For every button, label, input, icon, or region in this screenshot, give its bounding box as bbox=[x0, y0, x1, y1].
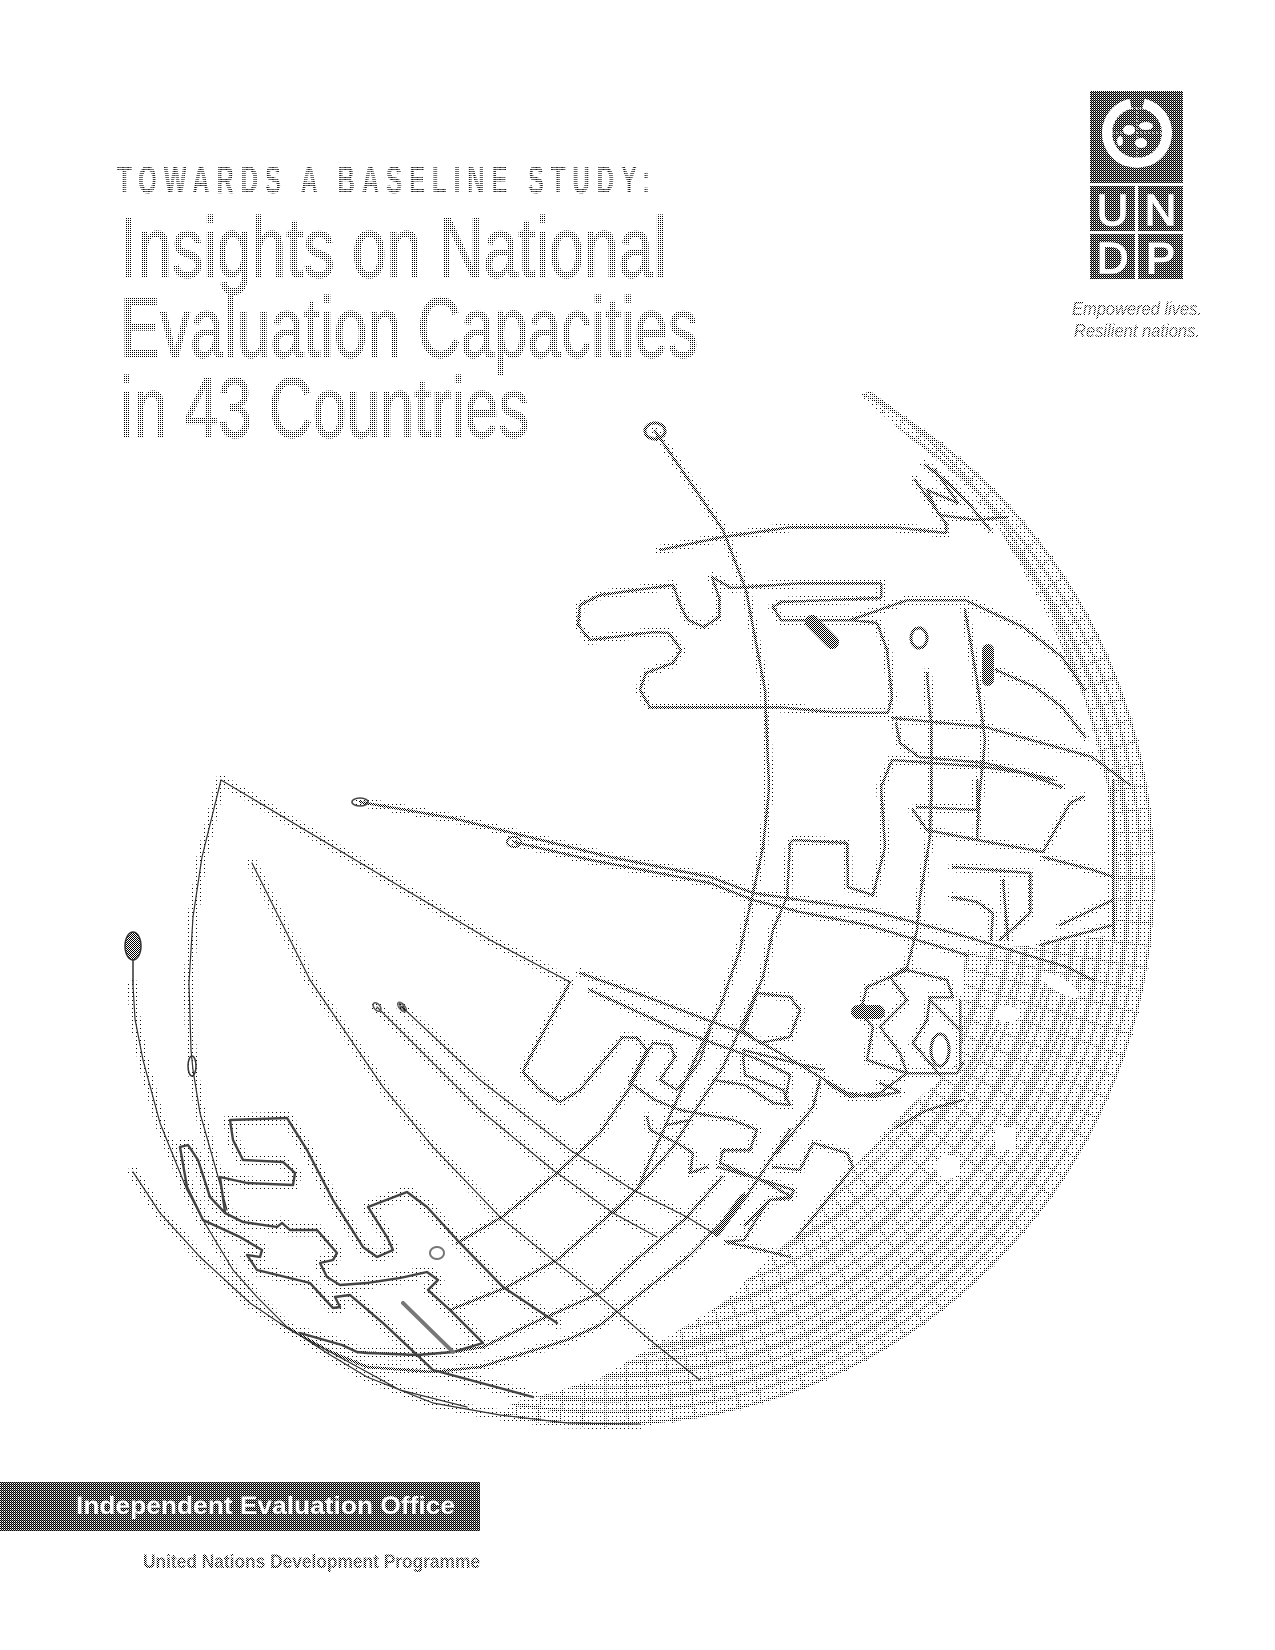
globe: thick short strokes bbox=[403, 622, 988, 1352]
globe: bold continent outline lower left bbox=[180, 1118, 557, 1397]
globe: dense lower-right mesh bbox=[504, 392, 1155, 1427]
organisation name: United Nations Development Programme bbox=[143, 1552, 480, 1573]
UNDP logo bbox=[1090, 91, 1183, 283]
tagline: Resilient nations. bbox=[1074, 321, 1200, 341]
office name: Independent Evaluation Office bbox=[76, 1492, 455, 1520]
logo tile N: N bbox=[1145, 186, 1176, 235]
logo tile P bbox=[1138, 234, 1183, 283]
globe illustration bbox=[124, 392, 1155, 1429]
kicker: Towards a baseline study: TOWARDS A BASELINE STUDY: bbox=[117, 158, 650, 201]
title line 1: Insights on National bbox=[120, 201, 667, 296]
logo emblem panel bbox=[1090, 91, 1183, 183]
office band bbox=[0, 1482, 480, 1531]
title line 3: in 43 Countries bbox=[120, 361, 529, 456]
globe: pin nodes bbox=[125, 423, 949, 1259]
tagline bbox=[1072, 299, 1202, 341]
logo tile U: U bbox=[1097, 186, 1128, 235]
logo tile D: D bbox=[1097, 234, 1128, 283]
title bbox=[117, 158, 698, 456]
logo tile P: P bbox=[1146, 234, 1175, 283]
tagline: Empowered lives. bbox=[1072, 299, 1202, 319]
globe: dotted grid and continent outlines bbox=[283, 431, 1130, 1372]
globe: thin dark long curves bbox=[133, 780, 713, 1424]
title line 2: Evaluation Capacities bbox=[120, 281, 698, 376]
